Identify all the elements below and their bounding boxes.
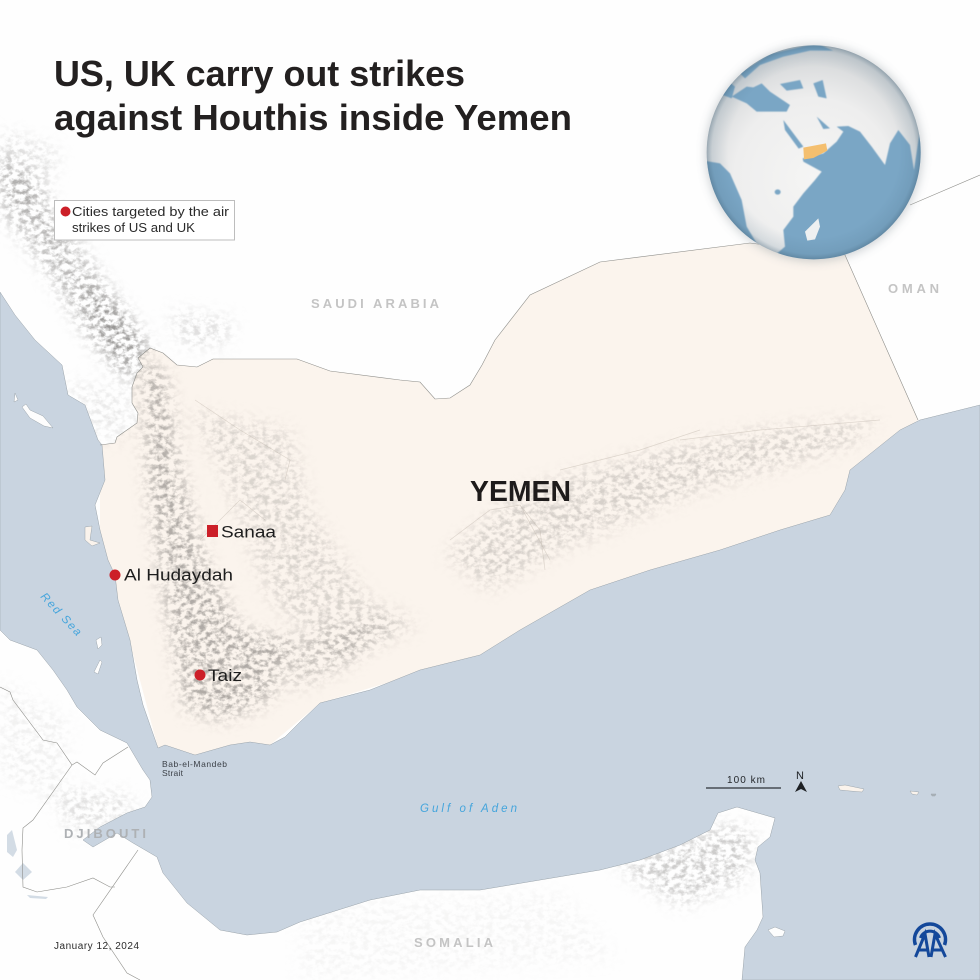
globe: shading: [707, 45, 921, 259]
country labels: SOMALIA: [414, 935, 494, 950]
wadi lines in Yemen: [195, 400, 880, 570]
title: US, UK carry out strikes: [54, 53, 465, 94]
title: [54, 53, 572, 138]
legend: strikes of US and UK: [72, 221, 196, 235]
terrain relief texture: [0, 130, 872, 964]
city: Taiz: [194, 666, 242, 685]
country labels: SAUDI ARABIA: [311, 296, 440, 311]
Yemen label: YEMEN: [470, 476, 571, 508]
date: January 12, 2024: [54, 941, 139, 952]
Yemen territory: [100, 243, 918, 755]
north arrow: N: [796, 770, 804, 782]
islands: [14, 393, 936, 937]
country labels: DJIBOUTI: [64, 826, 146, 841]
strait label: Strait: [162, 768, 184, 778]
country labels: OMAN: [888, 281, 939, 296]
strait label: Bab-el-Mandeb: [162, 759, 227, 769]
Socotra island: [937, 747, 980, 781]
strait label: [162, 759, 227, 778]
lakes in the Horn of Africa: [7, 830, 48, 899]
city: Taiz: Taiz: [208, 666, 242, 685]
sea: Red Sea and Gulf of Aden: [0, 292, 980, 980]
legend: [54, 200, 234, 240]
legend: Cities targeted by the air: [72, 205, 229, 219]
scale bar: 100 km: [727, 775, 765, 786]
globe: oceans and seas: [707, 45, 921, 260]
sea label: Gulf of Aden: Gulf of Aden: [420, 803, 517, 815]
country labels: [64, 281, 939, 950]
globe: Madagascar: [805, 218, 820, 241]
title: against Houthis inside Yemen: [54, 97, 572, 138]
north arrow: [795, 770, 807, 792]
globe shadow: [706, 45, 922, 261]
sea label: Red Sea: Red Sea: [38, 591, 83, 639]
city: Sanaa: Sanaa: [221, 522, 277, 542]
scale bar: [706, 775, 781, 788]
globe inset: [700, 43, 930, 270]
globe: Yemen highlighted: [803, 143, 827, 159]
AA logo: [914, 924, 946, 957]
legend dot: [60, 206, 70, 216]
city: Al Hudaydah: Al Hudaydah: [124, 566, 233, 584]
